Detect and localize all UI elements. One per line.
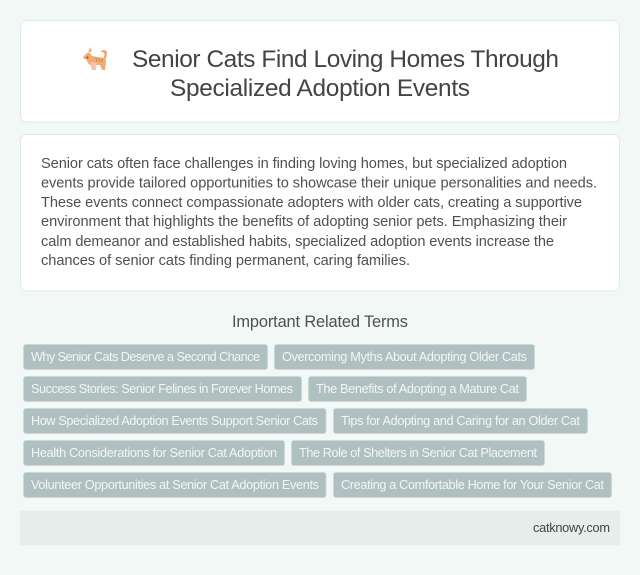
tag: comfortable home: Creating a Comfortable Home for Your Senior Cat: [341, 478, 604, 492]
description text: [41, 156, 597, 269]
tag: overcoming myths: [274, 344, 534, 370]
heading: related terms: Important Related Terms: [232, 313, 408, 331]
title: Specialized Adoption Events: [170, 75, 470, 102]
tag: volunteer: [24, 472, 326, 498]
tag: health: Health Considerations for Senior Cat Adoption: [31, 446, 277, 460]
panel: title card: [20, 20, 620, 122]
description text: environment that highlights the benefits of adopting senior pets. Emphasizing their: [41, 214, 567, 230]
tag: second chance: Why Senior Cats Deserve a Second Chance: [31, 350, 260, 364]
description text: chances of senior cats finding permanent, caring families.: [41, 253, 410, 269]
tag: specialized events: How Specialized Adoption Events Support Senior Cats: [31, 414, 318, 428]
description text: Senior cats often face challenges in finding loving homes, but specialized adoption: [41, 156, 567, 172]
tag: benefits: The Benefits of Adopting a Mature Cat: [316, 382, 519, 396]
tag: tips: Tips for Adopting and Caring for an Older Cat: [341, 414, 580, 428]
tag: success stories: [24, 376, 302, 402]
tag: success stories: Success Stories: Senior Felines in Forever Homes: [31, 382, 293, 396]
icon: orange cat: [83, 47, 107, 70]
tag: volunteer: Volunteer Opportunities at Senior Cat Adoption Events: [31, 478, 319, 492]
related terms tags: [24, 344, 612, 498]
description text: calm demeanor and established habits, specialized adoption events increase the: [41, 234, 554, 250]
tag: shelters: The Role of Shelters in Senior Cat Placement: [299, 446, 537, 460]
tag: tips: [334, 408, 588, 434]
footer: [20, 511, 620, 545]
tag: health: [24, 440, 284, 466]
description text: events provide tailored opportunities to showcase their unique personalities and needs.: [41, 176, 597, 192]
footer site name: catknowy.com: [533, 520, 610, 535]
tag: benefits: [308, 376, 526, 402]
description text: These events connect compassionate adopters with older cats, creating a supportive: [41, 195, 582, 211]
title: Senior Cats Find Loving Homes Through: [132, 46, 559, 73]
tag: specialized events: [24, 408, 326, 434]
title: [132, 46, 559, 102]
tag: second chance: [24, 344, 268, 370]
panel: description card: [20, 134, 620, 291]
tag: comfortable home: [334, 472, 612, 498]
tag: overcoming myths: Overcoming Myths About Adopting Older Cats: [282, 350, 527, 364]
tag: shelters: [292, 440, 544, 466]
